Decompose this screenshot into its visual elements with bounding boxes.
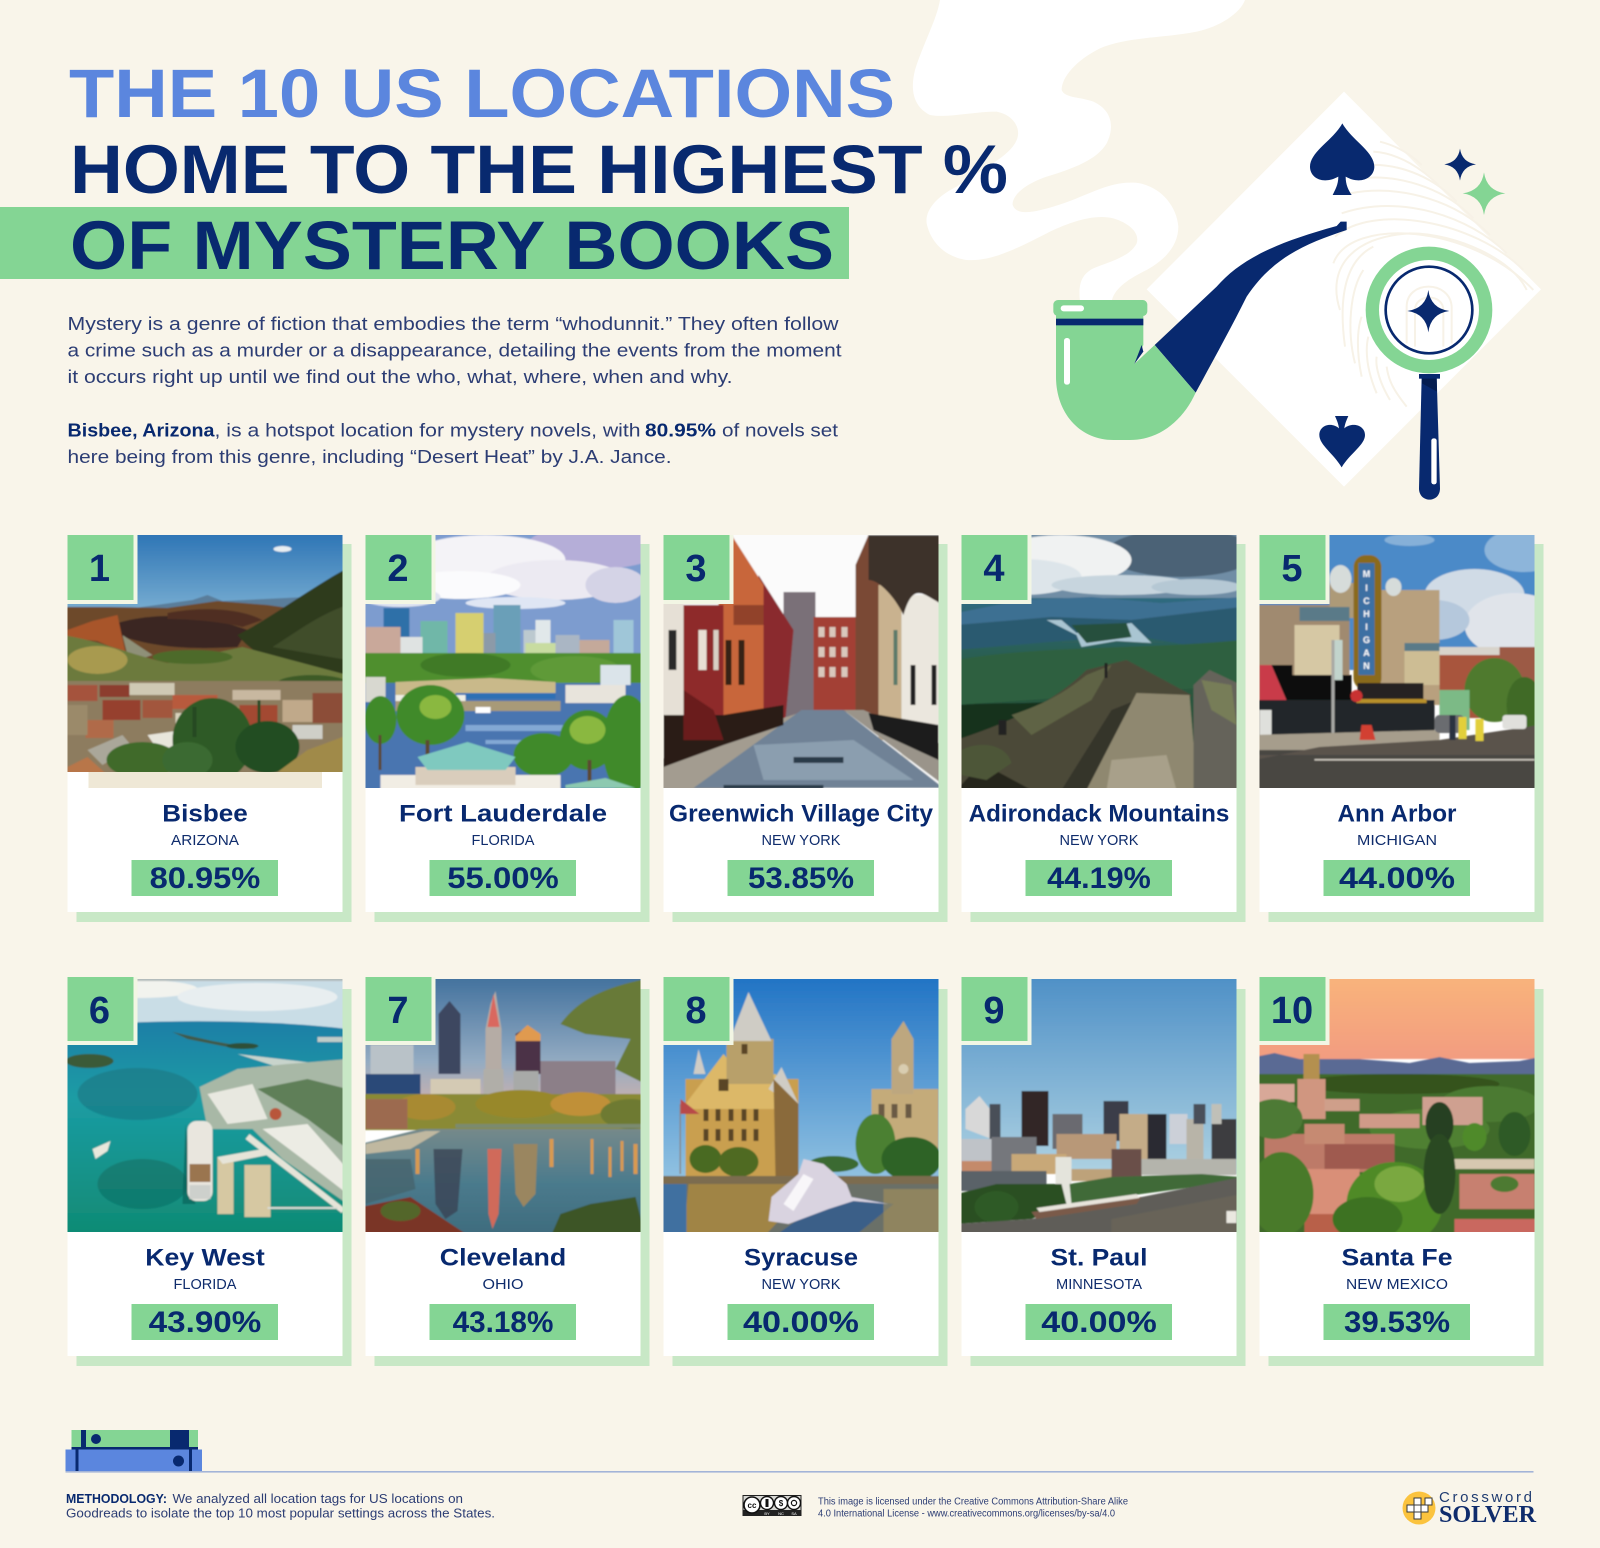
fingerprint [1333, 142, 1533, 407]
pipe rim [1053, 300, 1147, 316]
photo: Ann Arbor: A [1363, 648, 1370, 658]
percentage: 39.53% [1344, 1306, 1450, 1339]
spade top [1310, 123, 1374, 195]
state: MICHIGAN [1357, 833, 1437, 849]
state: OHIO [482, 1277, 524, 1293]
percentage: 44.19% [1047, 862, 1151, 895]
intro text: here being from this genre, including “Desert Heat” by J.A. Jance. [68, 446, 672, 467]
percentage [132, 1304, 278, 1340]
rank badge [962, 535, 1032, 604]
logo: Crossword Solver: SOLVER [1439, 1502, 1537, 1528]
photo: Ann Arbor: C [1363, 596, 1370, 606]
percentage: 53.85% [748, 862, 854, 895]
star navy [1444, 149, 1476, 181]
photo: Ann Arbor: I [1365, 583, 1368, 593]
rank badge [68, 977, 138, 1045]
photo: Ann Arbor: M [1363, 569, 1370, 579]
state: FLORIDA [174, 1277, 237, 1293]
name: Cleveland [440, 1245, 566, 1272]
card diamond [1147, 92, 1541, 487]
rank badge [1260, 977, 1330, 1045]
percentage [1324, 1304, 1470, 1340]
methodology: We analyzed all location tags for US locations on [172, 1492, 463, 1506]
intro text: of novels set [722, 420, 839, 440]
rank badge: 7 [387, 990, 409, 1032]
icon: creative commons badge: BY [764, 1511, 770, 1516]
name: Syracuse [744, 1245, 858, 1272]
percentage [1026, 860, 1172, 896]
rank badge: 8 [685, 990, 707, 1032]
intro text: a crime such as a murder or a disappearance, detailing the events from the moment [68, 340, 842, 360]
name: Fort Lauderdale [399, 801, 607, 828]
state: ARIZONA [171, 833, 239, 849]
photo: Adirondack Mountains [962, 535, 1236, 788]
pipe bowl [1056, 313, 1196, 440]
title highlight band [0, 207, 849, 279]
rank badge [1260, 535, 1330, 604]
card panel [962, 535, 1236, 912]
name: Santa Fe [1342, 1245, 1452, 1272]
license text: This image is licensed under the Creative Commons Attribution-Share Alike [818, 1497, 1128, 1508]
card panel [664, 979, 938, 1356]
intro text: , is a hotspot location for mystery novels, with [214, 420, 640, 440]
spade bottom [1319, 416, 1365, 467]
pipe band [1056, 319, 1143, 325]
photo: Ann Arbor: G [1363, 635, 1370, 645]
intro text: Bisbee, Arizona [68, 420, 215, 440]
photo: St. Paul [962, 979, 1236, 1232]
logo: Crossword Solver [1402, 1489, 1537, 1528]
name: Ann Arbor [1338, 801, 1456, 828]
methodology: Goodreads to isolate the top 10 most popular settings across the States. [66, 1507, 495, 1521]
name: Key West [145, 1245, 265, 1272]
card panel [962, 979, 1236, 1356]
photo: Santa Fe [1260, 979, 1534, 1232]
percentage [728, 1304, 874, 1340]
percentage [430, 1304, 576, 1340]
rank badge: 1 [89, 548, 110, 590]
percentage: 40.00% [1041, 1306, 1157, 1339]
percentage: 40.00% [743, 1306, 859, 1339]
title: HOME TO THE HIGHEST % [70, 131, 1008, 208]
photo: Ann Arbor: N [1363, 661, 1370, 671]
pipe notch [1134, 345, 1143, 364]
name: St. Paul [1050, 1245, 1148, 1272]
icon: creative commons badge: NC [778, 1511, 784, 1516]
smoke [913, 0, 1245, 302]
percentage: 44.00% [1339, 862, 1455, 895]
methodology [66, 1492, 495, 1521]
photo: Bisbee [68, 535, 342, 772]
star green [1463, 172, 1505, 215]
card 10: Santa Fe [1246, 974, 1544, 1366]
name: Adirondack Mountains [969, 801, 1229, 828]
photo: Greenwich Village [664, 535, 938, 788]
rank badge [664, 977, 734, 1045]
percentage [132, 860, 278, 896]
card panel [366, 535, 640, 912]
logo: Crossword Solver: Crossword [1439, 1489, 1532, 1506]
license text: 4.0 International License - www.creativecommons.org/licenses/by-sa/4.0 [818, 1509, 1115, 1520]
percentage [1324, 860, 1470, 896]
card shadow [970, 989, 1246, 1366]
card shadow [374, 544, 650, 922]
intro text: it occurs right up until we find out the who, what, where, when and why. [68, 366, 732, 387]
percentage: 55.00% [447, 862, 559, 895]
illustration: pipe, playing card, magnifying glass [1053, 92, 1541, 500]
card panel [1260, 535, 1534, 912]
icon: creative commons badge: cc [748, 1501, 757, 1510]
card shadow [1268, 989, 1544, 1366]
photo: Ann Arbor [1260, 535, 1534, 788]
card panel [1260, 979, 1534, 1356]
icon: stack of books [66, 1430, 202, 1472]
intro text: 80.95% [645, 420, 717, 440]
state: NEW YORK [762, 1277, 841, 1293]
beige strip [88, 772, 322, 788]
rank badge [962, 977, 1032, 1045]
card 8: Syracuse [658, 974, 948, 1366]
footer line [66, 1471, 1534, 1473]
card panel [68, 979, 342, 1356]
card 2: Fort Lauderdale [360, 525, 666, 922]
state: FLORIDA [472, 833, 535, 849]
rank badge: 10 [1271, 990, 1313, 1032]
percentage [430, 860, 576, 896]
icon: creative commons badge: $ [779, 1499, 784, 1508]
card panel [68, 535, 342, 912]
card shadow [1268, 544, 1544, 922]
photo: Cleveland [366, 979, 640, 1232]
magnifier lens [1372, 253, 1486, 367]
photo: Fort Lauderdale [366, 535, 640, 788]
pipe stem [1155, 222, 1347, 393]
card 4: Adirondack Mountains [956, 529, 1256, 922]
card 7: Cleveland [360, 974, 660, 1366]
card 5: Ann Arbor [1254, 528, 1564, 922]
percentage: 43.90% [149, 1306, 261, 1339]
percentage: 43.18% [453, 1306, 553, 1339]
card shadow [76, 989, 352, 1366]
photo: Ann Arbor: I [1365, 622, 1368, 632]
rank badge: 5 [1281, 548, 1303, 590]
state: MINNESOTA [1056, 1277, 1142, 1293]
rank badge: 3 [685, 548, 707, 590]
state: NEW MEXICO [1346, 1277, 1448, 1293]
card 6: Key West [62, 974, 352, 1366]
state: NEW YORK [1060, 833, 1139, 849]
icon: creative commons badge [742, 1495, 802, 1516]
card shadow [970, 544, 1246, 922]
card shadow [672, 989, 948, 1366]
intro text [68, 313, 842, 467]
pipe highlights [1061, 305, 1084, 311]
title [0, 55, 1008, 284]
magnifier handle [1419, 377, 1440, 500]
card 9: St. Paul [956, 974, 1246, 1366]
intro text: Mystery is a genre of fiction that embodies the term “whodunnit.” They often follow [68, 313, 839, 334]
percentage [1026, 1304, 1172, 1340]
title: OF MYSTERY BOOKS [70, 207, 834, 284]
photo: Syracuse [664, 979, 938, 1232]
rank badge: 6 [89, 990, 110, 1032]
rank badge: 9 [983, 990, 1005, 1032]
photo: Key West [68, 979, 342, 1232]
license text [818, 1497, 1128, 1520]
rank badge [366, 535, 436, 604]
name: Greenwich Village City [669, 801, 934, 828]
state: NEW YORK [762, 833, 841, 849]
rank badge [68, 535, 138, 604]
card shadow [374, 989, 650, 1366]
photo: Ann Arbor: H [1363, 609, 1370, 619]
percentage [728, 860, 874, 896]
card panel [664, 535, 938, 912]
card 3: Greenwich Village City [658, 530, 948, 922]
methodology: METHODOLOGY: [66, 1492, 167, 1506]
rank badge [366, 977, 436, 1045]
name: Bisbee [162, 801, 248, 828]
rank badge [664, 535, 734, 604]
icon: creative commons badge: SA [791, 1511, 797, 1516]
rank badge: 4 [983, 548, 1005, 590]
card panel [366, 979, 640, 1356]
card shadow [76, 544, 352, 922]
card 1: Bisbee [62, 530, 352, 922]
percentage: 80.95% [150, 862, 260, 895]
card shadow [672, 544, 948, 922]
title: THE 10 US LOCATIONS [69, 55, 895, 132]
rank badge: 2 [387, 548, 409, 590]
